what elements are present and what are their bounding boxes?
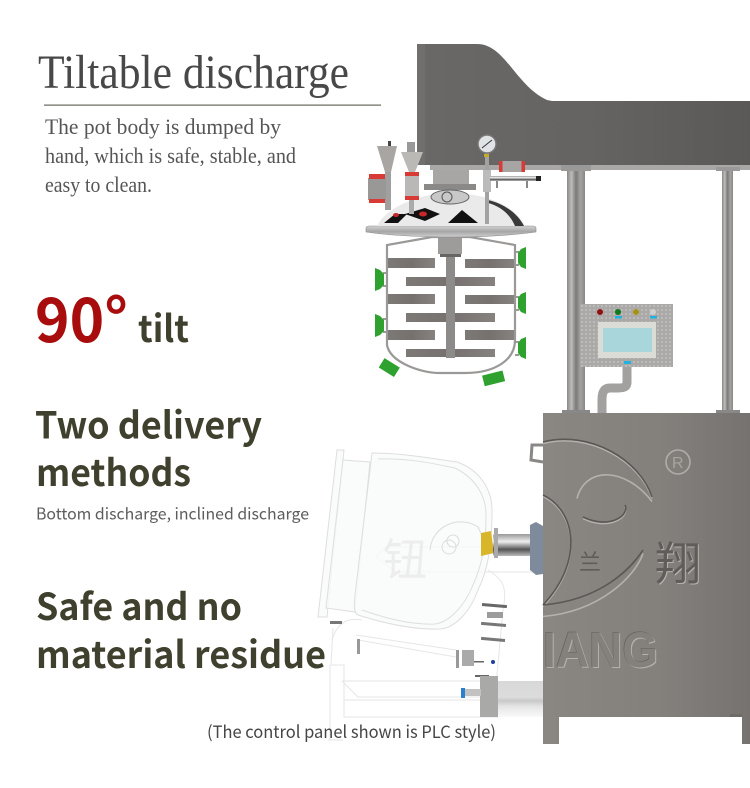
embossed logo [543,439,690,616]
heading: safe and no material residue: Safe and no [36,577,242,631]
ghost pot body [318,450,492,629]
ghost band [498,681,543,717]
description text: The pot body is dumped by [45,114,281,139]
footnote: (The control panel shown is PLC style) [207,718,496,743]
ghost tilted pot illustration [318,450,543,740]
actuated valve [490,161,541,188]
ghost watermark character: 钮 [383,524,427,588]
left support column [561,165,591,413]
discharge valve [481,522,543,575]
embossed registered mark: R [672,455,684,472]
touch screen [598,322,656,358]
red fittings [393,212,427,217]
embossed chinese characters: 兰 [579,545,601,577]
delivery methods detail: Bottom discharge, inclined discharge [36,500,309,524]
vessel shell [387,237,515,373]
description text: easy to clean. [45,172,152,197]
embossed brand text: IANG [544,623,659,679]
embossed chinese characters: 翔 [656,529,702,595]
ghost fittings [330,603,507,717]
scraper brackets [383,251,519,356]
embossed brand text: IANG [543,622,658,678]
heading: safe and no material residue [36,577,326,679]
heading: two delivery methods [35,396,262,497]
agitator shaft [438,238,462,358]
side handle [531,445,543,462]
feed hopper one [368,141,397,210]
title: Tiltable discharge [38,46,349,99]
description text: hand, which is safe, stable, and [45,143,296,168]
stat: 90 degree tilt: 90° [35,271,128,360]
heading: safe and no material residue: material residue [36,625,326,679]
right support column [716,167,740,413]
feed hopper two [401,142,423,214]
machine base cabinet [531,413,750,744]
heading: two delivery methods: methods [36,443,191,497]
embossed chinese characters [579,528,702,595]
polished dome lid [377,193,525,226]
stat: 90 degree tilt: tilt [138,299,189,353]
title underline [44,105,381,106]
ghost frame [328,547,543,740]
upper beam [417,44,750,170]
central reducer [424,170,476,204]
description text [45,114,296,197]
ghost circles [430,522,484,554]
pressure gauge [478,135,496,224]
indicator lights [597,309,657,364]
green scrapers [375,247,526,386]
embossed brand text: IANG [542,622,658,678]
stat: 90 degree tilt [35,271,189,360]
mixing vessel [366,135,541,386]
control panel [580,304,673,367]
inner paddles [406,277,495,357]
outer paddles [388,258,514,340]
heading: two delivery methods: Two delivery [35,396,262,450]
vessel flange [366,226,536,237]
control panel conduit [602,367,627,413]
embossed chinese characters: 翔 [655,528,701,594]
